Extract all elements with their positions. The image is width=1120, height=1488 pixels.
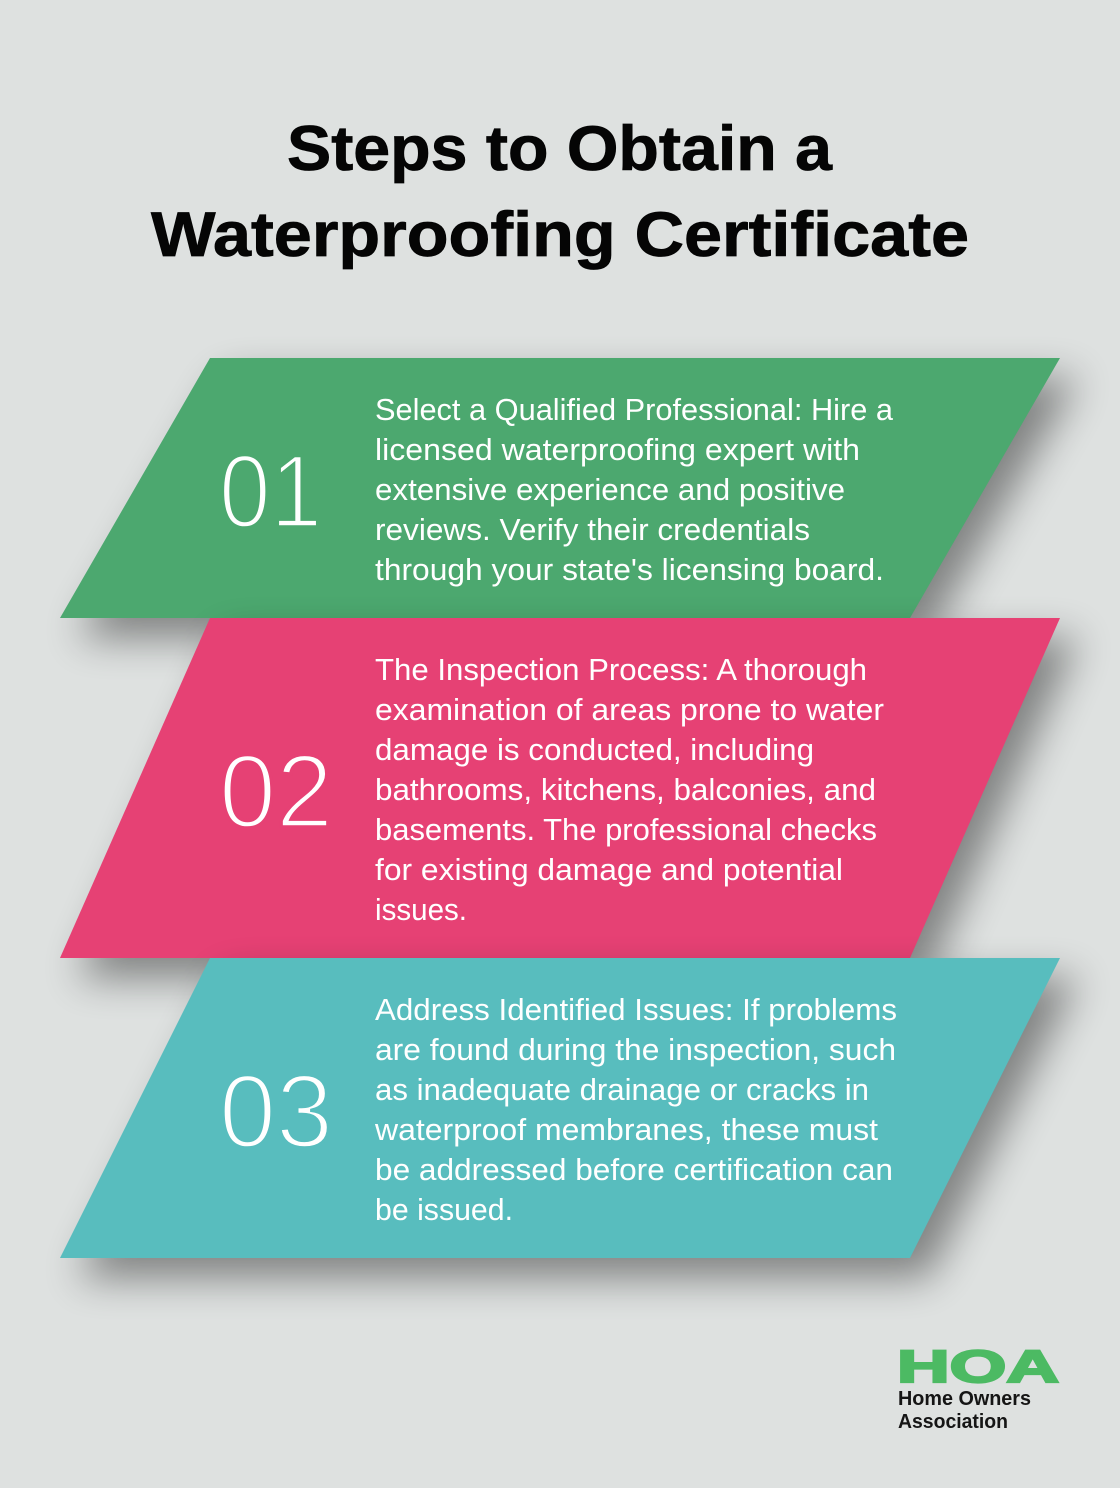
step 2 text: The Inspection Process: A thorough: [375, 652, 867, 687]
title: Waterproofing Certificate: [151, 200, 969, 270]
logo: HOA Home Owners Association: Association: [898, 1411, 1008, 1433]
step 3 text: Address Identified Issues: If problems: [375, 992, 897, 1027]
step 1 text: reviews. Verify their credentials: [375, 512, 810, 547]
logo: HOA Home Owners Association: Home Owners: [898, 1388, 1031, 1410]
step 3 text: are found during the inspection, such: [375, 1032, 896, 1067]
step 1 text: Select a Qualified Professional: Hire a: [375, 392, 894, 427]
step number 03: 03: [219, 1054, 333, 1170]
logo: HOA Home Owners Association: [897, 1341, 1059, 1433]
step 1 text: licensed waterproofing expert with: [375, 432, 860, 467]
step 3 text: be addressed before certification can: [375, 1152, 893, 1187]
step 2 text: basements. The professional checks: [375, 812, 877, 847]
logo: HOA Home Owners Association: HOA: [897, 1341, 1059, 1392]
step 3 text: waterproof membranes, these must: [374, 1112, 878, 1147]
step 2 text: for existing damage and potential: [375, 852, 843, 887]
step 2 text: bathrooms, kitchens, balconies, and: [375, 772, 876, 807]
step 2 text: examination of areas prone to water: [375, 692, 884, 727]
step 3 text: be issued.: [375, 1192, 513, 1227]
step 1 text: extensive experience and positive: [375, 472, 845, 507]
step 3 text: as inadequate drainage or cracks in: [375, 1072, 869, 1107]
step 2 text: issues.: [375, 892, 467, 927]
step 2 text: damage is conducted, including: [375, 732, 814, 767]
step 3 text: [374, 992, 897, 1227]
panel: step 1: [60, 358, 1078, 638]
step number 01: 01: [219, 434, 322, 550]
step 1 text: through your state's licensing board.: [375, 552, 884, 587]
step 1 text: [375, 392, 894, 587]
panel: step 2: [60, 618, 1078, 978]
title: [151, 114, 969, 270]
step 2 text: [375, 652, 884, 927]
title: Steps to Obtain a: [287, 114, 833, 184]
step number 02: 02: [219, 734, 333, 850]
panel: step 3: [60, 958, 1078, 1278]
